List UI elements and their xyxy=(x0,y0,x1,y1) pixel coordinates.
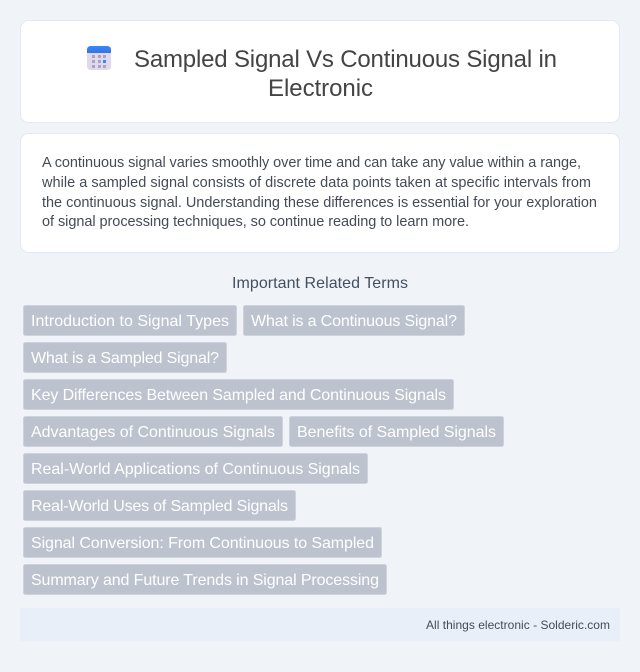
text block: description paragraph xyxy=(41,155,597,230)
tag: summary: Summary and Future Trends in Signal Processing xyxy=(31,572,379,589)
tag: sampled signal: What is a Sampled Signal? xyxy=(31,350,219,367)
tag: applications: Real-World Applications of Continuous Signals xyxy=(31,461,360,478)
tag: applications xyxy=(24,454,368,484)
panel: related term tags xyxy=(24,306,504,594)
text block: description paragraph: of signal processing techniques, so continue reading to learn more. xyxy=(42,214,469,230)
heading: important related terms: Important Related Terms xyxy=(232,275,408,292)
tag: introduction xyxy=(24,306,236,336)
title: Electronic xyxy=(268,75,373,102)
text block: description paragraph: the continuous signal. Understanding these differences is essential for your exploration xyxy=(42,195,597,211)
tag: sampled signal xyxy=(24,342,226,372)
text block: description paragraph: while a sampled signal consists of discrete data points taken at specific intervals from xyxy=(41,175,591,191)
tag: advantages: Advantages of Continuous Signals xyxy=(31,424,275,441)
tag: uses: Real-World Uses of Sampled Signals xyxy=(31,498,288,515)
tag: uses xyxy=(24,490,296,520)
tag: key differences xyxy=(24,380,454,410)
tag: benefits: Benefits of Sampled Signals xyxy=(297,424,496,441)
tag: conversion: Signal Conversion: From Continuous to Sampled xyxy=(31,535,374,552)
footer: All things electronic - Solderic.com xyxy=(426,618,610,632)
icon: calendar xyxy=(87,46,111,70)
tag: continuous signal xyxy=(244,306,464,336)
tag: summary xyxy=(24,564,386,594)
text block: description paragraph: A continuous signal varies smoothly over time and can take any value within a range, xyxy=(42,155,581,171)
tag: advantages xyxy=(24,416,282,446)
tag: benefits xyxy=(290,416,504,446)
title xyxy=(134,46,557,102)
tag: continuous signal: What is a Continuous Signal? xyxy=(251,313,457,330)
title: Sampled Signal Vs Continuous Signal in xyxy=(134,46,557,73)
panel: title card xyxy=(20,20,620,122)
tag: conversion xyxy=(24,528,382,558)
tag: key differences: Key Differences Between Sampled and Continuous Signals xyxy=(31,387,446,404)
panel: description xyxy=(20,134,620,252)
footer xyxy=(20,608,620,642)
tag: introduction: Introduction to Signal Types xyxy=(31,313,229,330)
